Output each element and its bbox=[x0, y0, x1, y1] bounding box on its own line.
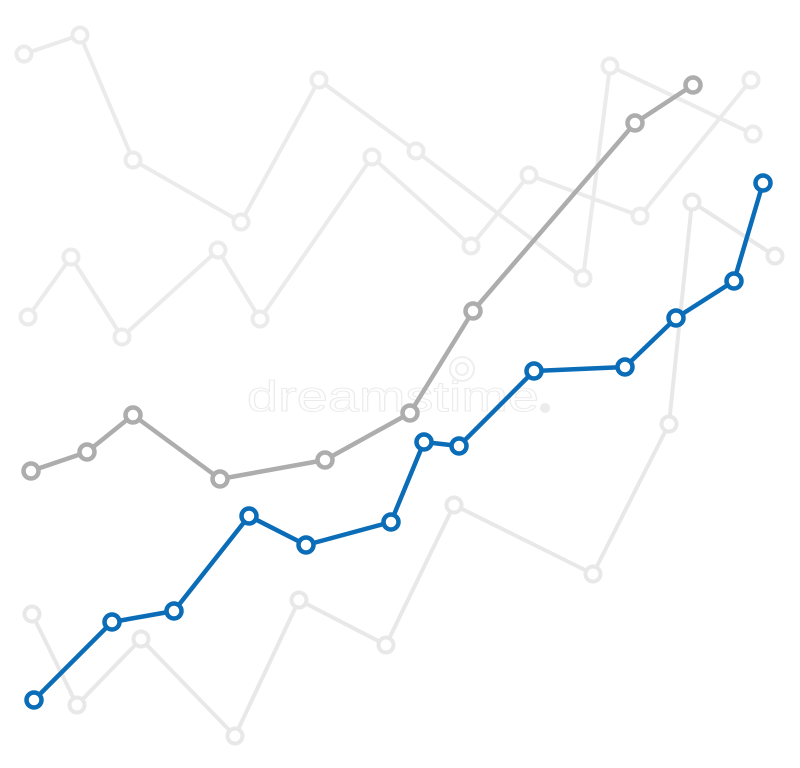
blue line series bbox=[26, 176, 770, 708]
grey line series bbox=[24, 78, 700, 486]
watermark bbox=[247, 357, 550, 421]
background line: middle series bbox=[20, 72, 758, 344]
background line: upper right series bbox=[576, 58, 760, 286]
background line: top left series bbox=[16, 28, 590, 286]
watermark: dreamstime bbox=[247, 373, 539, 421]
background line: bottom series bbox=[24, 194, 782, 744]
